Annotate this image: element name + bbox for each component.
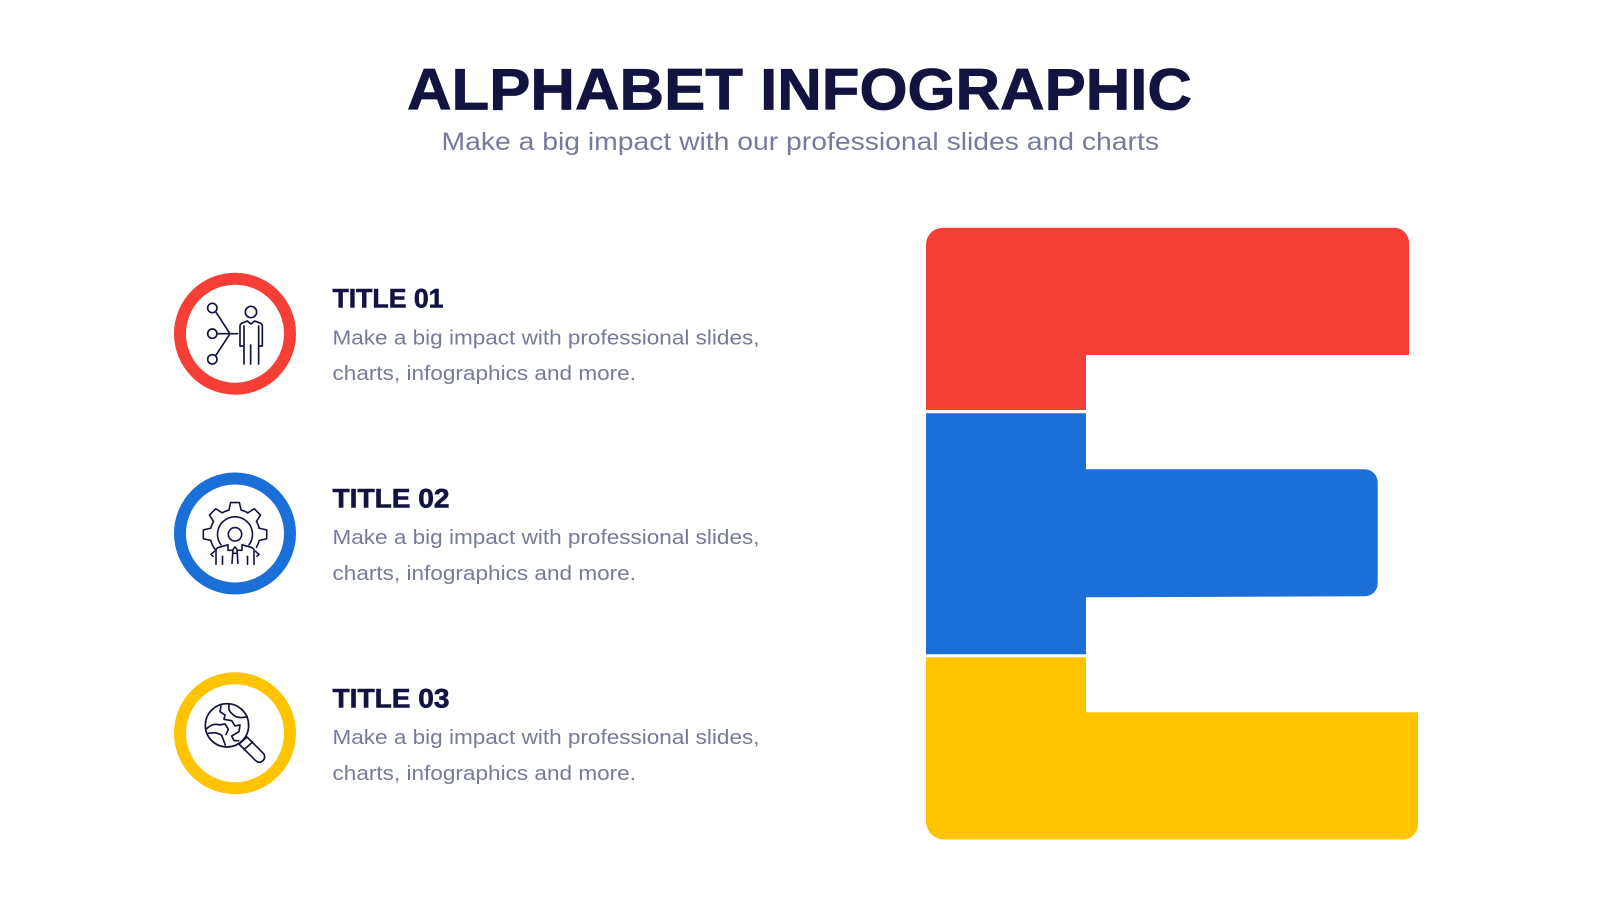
chart: letter E — [926, 228, 1418, 839]
item title 03: TITLE 03 — [332, 684, 450, 714]
title: ALPHABET INFOGRAPHIC — [407, 57, 1192, 122]
item description 03: Make a big impact with professional slides, — [332, 726, 760, 749]
item title 01: TITLE 01 — [332, 284, 444, 314]
item description 03: charts, infographics and more. — [332, 762, 636, 785]
icon: red ring with network and person — [180, 279, 290, 389]
icon: yellow ring with globe magnifier — [180, 678, 290, 788]
letter E bottom segment (yellow) — [926, 657, 1418, 840]
letter E middle segment (blue) — [926, 413, 1378, 654]
panel: item 03 — [180, 678, 760, 788]
panel: item 01 — [180, 279, 760, 389]
subtitle: Make a big impact with our professional slides and charts — [442, 128, 1159, 156]
icon: blue ring with gear and person — [180, 478, 290, 588]
panel: item 02 — [180, 478, 760, 588]
letter E top segment (red) — [926, 228, 1409, 410]
item description 02: charts, infographics and more. — [332, 562, 636, 585]
item description 01: charts, infographics and more. — [332, 362, 636, 385]
item description 01: Make a big impact with professional slides, — [332, 326, 760, 349]
item title 02: TITLE 02 — [332, 484, 450, 514]
item description 02: Make a big impact with professional slides, — [332, 526, 760, 549]
